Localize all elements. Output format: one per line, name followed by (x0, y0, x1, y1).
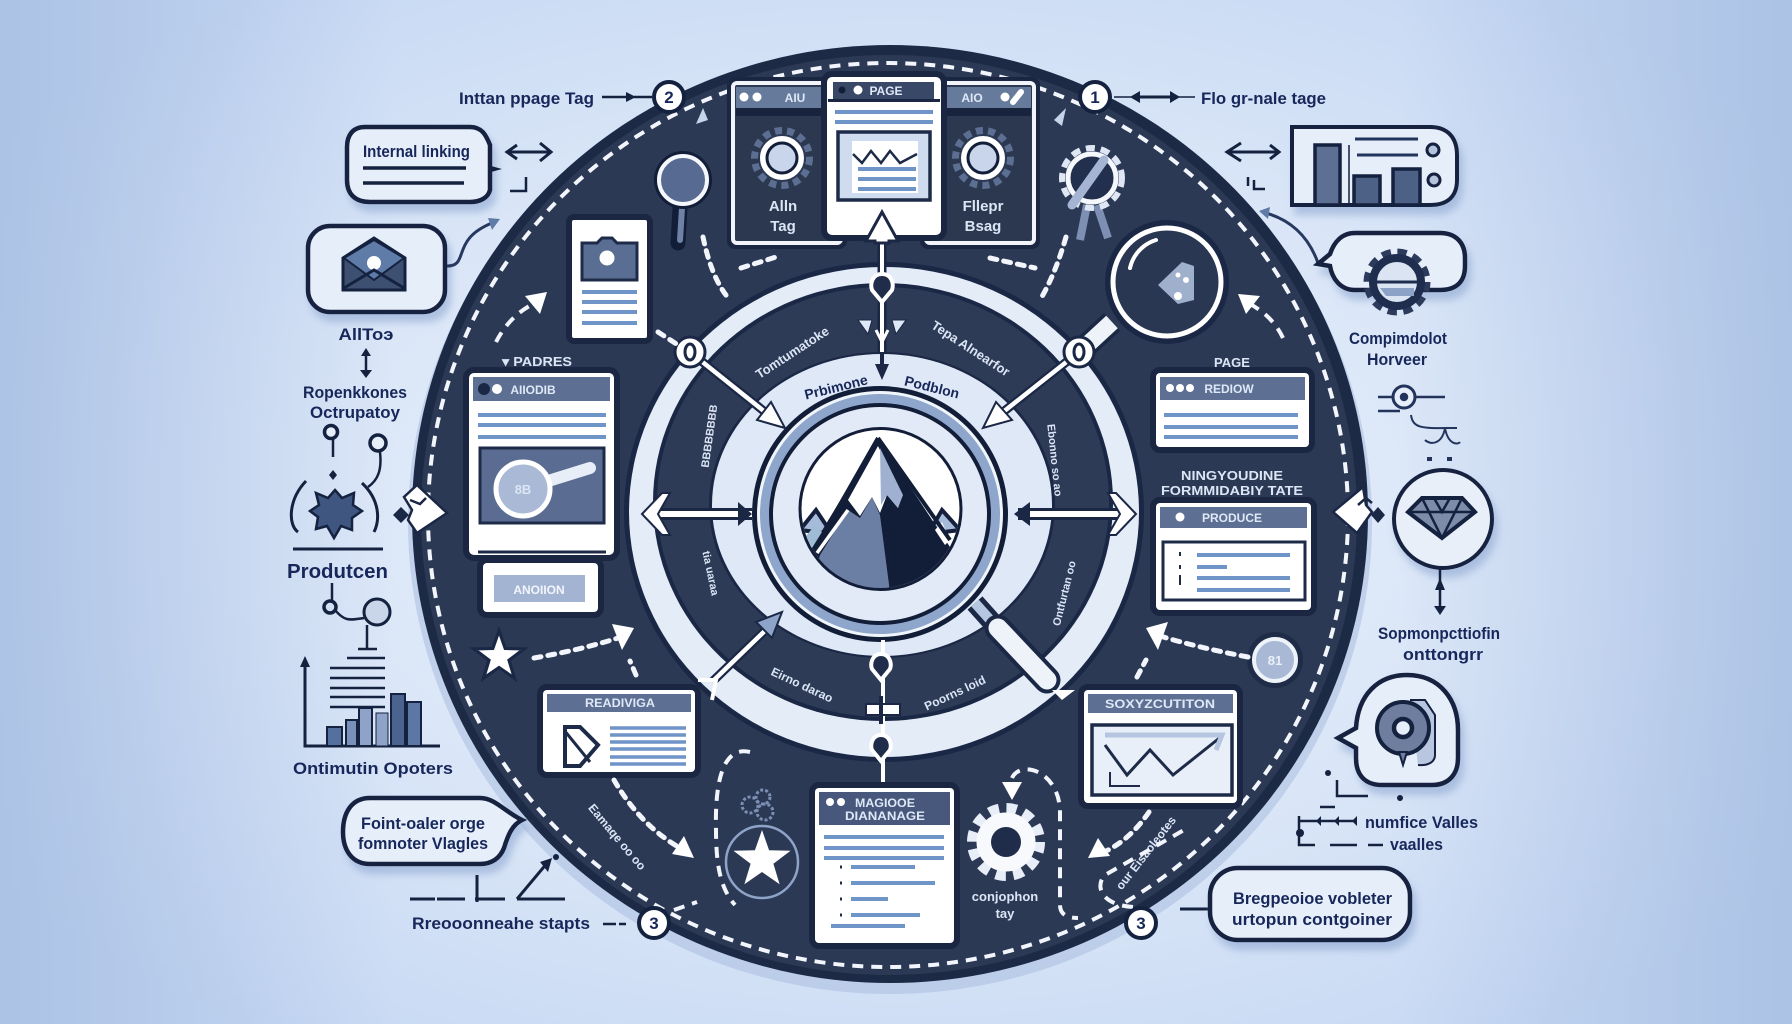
top vertical double arrow (858, 212, 906, 380)
review window (1156, 373, 1309, 447)
right horizontal double arrow (1014, 493, 1136, 535)
small numbered circle (1247, 632, 1303, 688)
small cluster icon (742, 790, 773, 820)
callout: foint-color orge: Foint-oaler orge (361, 814, 485, 833)
bar panel top right (1292, 127, 1457, 205)
ring labels: Eirno darao (769, 665, 835, 705)
magnifier handle lower right (975, 603, 1075, 700)
ring labels: Tomtumatoke (753, 323, 832, 382)
top window: filter tag: Fllepr (963, 198, 1004, 215)
ring labels: Tepa Alnearfor (929, 318, 1013, 379)
produce window: PRODUCE (1202, 511, 1262, 525)
bottom document window (815, 788, 954, 943)
ring labels: Podblon (903, 372, 961, 402)
vertical arrow under diamond (1434, 568, 1446, 615)
top window: alt tag: AIU (785, 91, 805, 105)
readings window: READIVIGA (585, 696, 655, 710)
gear caption (972, 889, 1038, 921)
bottom vertical connector (866, 640, 900, 790)
review window: REDIOW (1204, 382, 1254, 396)
central lens with mountain logo (752, 386, 1008, 642)
callout: foint-color orge (343, 798, 522, 864)
large left window with magnifier: 8B (515, 482, 531, 497)
badge 2 (654, 82, 684, 112)
callout: bottom right: Bregpeoioe vobleter (1233, 889, 1392, 908)
top right label with arrow: Flo gr-nale tage (1201, 89, 1326, 108)
ring labels: BBBBBBBB (700, 404, 720, 468)
top window: filter tag: AIO (961, 91, 983, 105)
callout: bottom right (1180, 868, 1410, 940)
diamond tag right (1333, 487, 1385, 533)
dashed flow arrows (496, 108, 1283, 918)
label: pages above left window: ▾ PADRES (501, 354, 572, 369)
label: formidability rate (1161, 468, 1303, 498)
label: component hover: Horveer (1367, 350, 1427, 369)
ring labels: our Eisaoleotes (1113, 813, 1179, 893)
badge 1: 1 (1090, 88, 1100, 107)
label: sopmonpctiofin ontongrr (1378, 624, 1500, 664)
label: responsive opportunity: Octrupatoy (310, 403, 401, 422)
small numbered circle: 81 (1268, 653, 1282, 668)
top window: filter tag: Bsag (965, 218, 1001, 235)
label: sopmonpctiofin ontongrr: Sopmonpcttiofin (1378, 624, 1500, 643)
large left window with magnifier (469, 373, 614, 555)
top right label with arrow (1114, 89, 1326, 108)
left and right ring nodes with arrows (675, 337, 1094, 428)
top window: filter tag (920, 77, 1040, 249)
top window: alt tag: Alln (769, 198, 797, 215)
label: alt tag: AllToэ (338, 325, 394, 344)
label: responsive opportunity: Ropenkkones (303, 383, 407, 402)
badge 3 left (639, 908, 669, 938)
dashed connector lower left (410, 854, 565, 902)
badge 3 left: 3 (649, 914, 659, 933)
vertical arrow under alt tag (360, 348, 372, 378)
bottom document window: MAGIOOE (855, 796, 915, 810)
label: production: Produtcen (287, 561, 388, 583)
label: responsive starts: Rreooonneahe stapts (412, 914, 590, 933)
badge 2: 2 (664, 88, 674, 107)
gear icon bottom (973, 809, 1039, 875)
label: formidability rate: NINGYOUDINE (1181, 468, 1283, 483)
readings window (543, 690, 695, 772)
ring labels: tia uaraa (699, 550, 721, 598)
top centre page window: PAGE (869, 84, 903, 98)
conversion window with trend chart (1084, 690, 1237, 803)
produce window (1156, 503, 1311, 610)
label: formidability rate: FORMMIDABIY TATE (1161, 483, 1303, 498)
label: component hover: Compimdolot (1349, 329, 1447, 348)
callout: gear (1318, 233, 1465, 311)
ring labels: Eamaqe oo oo (585, 801, 649, 873)
label: component hover (1349, 329, 1447, 369)
top window: alt tag (727, 77, 847, 249)
large magnifier right (1086, 220, 1229, 346)
label: page above review window: PAGE (1214, 355, 1250, 370)
gear caption: tay (996, 906, 1015, 921)
ring labels (585, 318, 1179, 893)
circuit connector right (1378, 386, 1460, 459)
bottom document window: DIANANAGE (845, 809, 925, 823)
callout: bottom right: urtopun contgoiner (1232, 910, 1392, 929)
double arrow near internal linking (507, 143, 551, 191)
small anchor box under left window (483, 563, 598, 612)
ring labels: Poorns loid (922, 673, 988, 713)
label: responsive opportunity (303, 383, 407, 422)
large left window with magnifier: AIIODIB (510, 383, 556, 397)
circuit lines lower right (1296, 770, 1403, 845)
top window: alt tag: Tag (770, 218, 796, 235)
label: numfice values: numfice Valles (1365, 813, 1478, 832)
label: numfice values: vaalles (1390, 835, 1443, 854)
pin connectors and starburst (291, 426, 386, 549)
pin connectors above bar chart (324, 583, 390, 648)
magnifier icon left top (654, 151, 712, 243)
star in circle bottom (726, 826, 798, 898)
medal icon right top (1062, 148, 1122, 240)
ring labels: Ontfurtan oo (1051, 559, 1079, 627)
ring labels: Prbimone (803, 371, 869, 403)
top centre page window (827, 77, 941, 235)
label: sopmonpctiofin ontongrr: onttongrr (1403, 645, 1483, 664)
badge 3 right: 3 (1136, 914, 1146, 933)
bar chart left (300, 649, 440, 746)
callout: camera (1338, 675, 1458, 785)
double arrow near bar panel (1227, 143, 1279, 189)
label: optimization operators: Ontimutin Opoters (293, 759, 453, 778)
badge 1 (1080, 82, 1110, 112)
badge 3 right (1126, 908, 1156, 938)
concentric rings (624, 262, 1144, 762)
label: numfice values (1365, 813, 1478, 854)
top left label with arrow: Inttan ppage Tag (459, 89, 594, 108)
top left label with arrow (459, 89, 652, 108)
diamond in circle (1394, 470, 1492, 568)
lower left diagonal arrow (698, 612, 782, 700)
curved arrow from envelope (447, 218, 500, 266)
callout: internal linking: Internal linking (363, 142, 470, 161)
diamond tag left (393, 485, 447, 533)
conversion window with trend chart: SOXYZCUTITON (1105, 697, 1215, 711)
callout: internal linking (347, 127, 502, 202)
main dark circle (408, 45, 1372, 994)
curved arrow from gear callout (1259, 207, 1318, 263)
star left (474, 631, 524, 678)
gear caption: conjophon (972, 889, 1038, 904)
left horizontal double arrow (642, 493, 752, 535)
callout: envelope (308, 226, 445, 312)
ring labels: Ebonno so ao (1044, 423, 1064, 497)
small anchor box under left window: ANOIION (513, 583, 565, 597)
callout: foint-color orge: fomnoter Vlagles (358, 834, 488, 853)
left document card (572, 220, 647, 338)
